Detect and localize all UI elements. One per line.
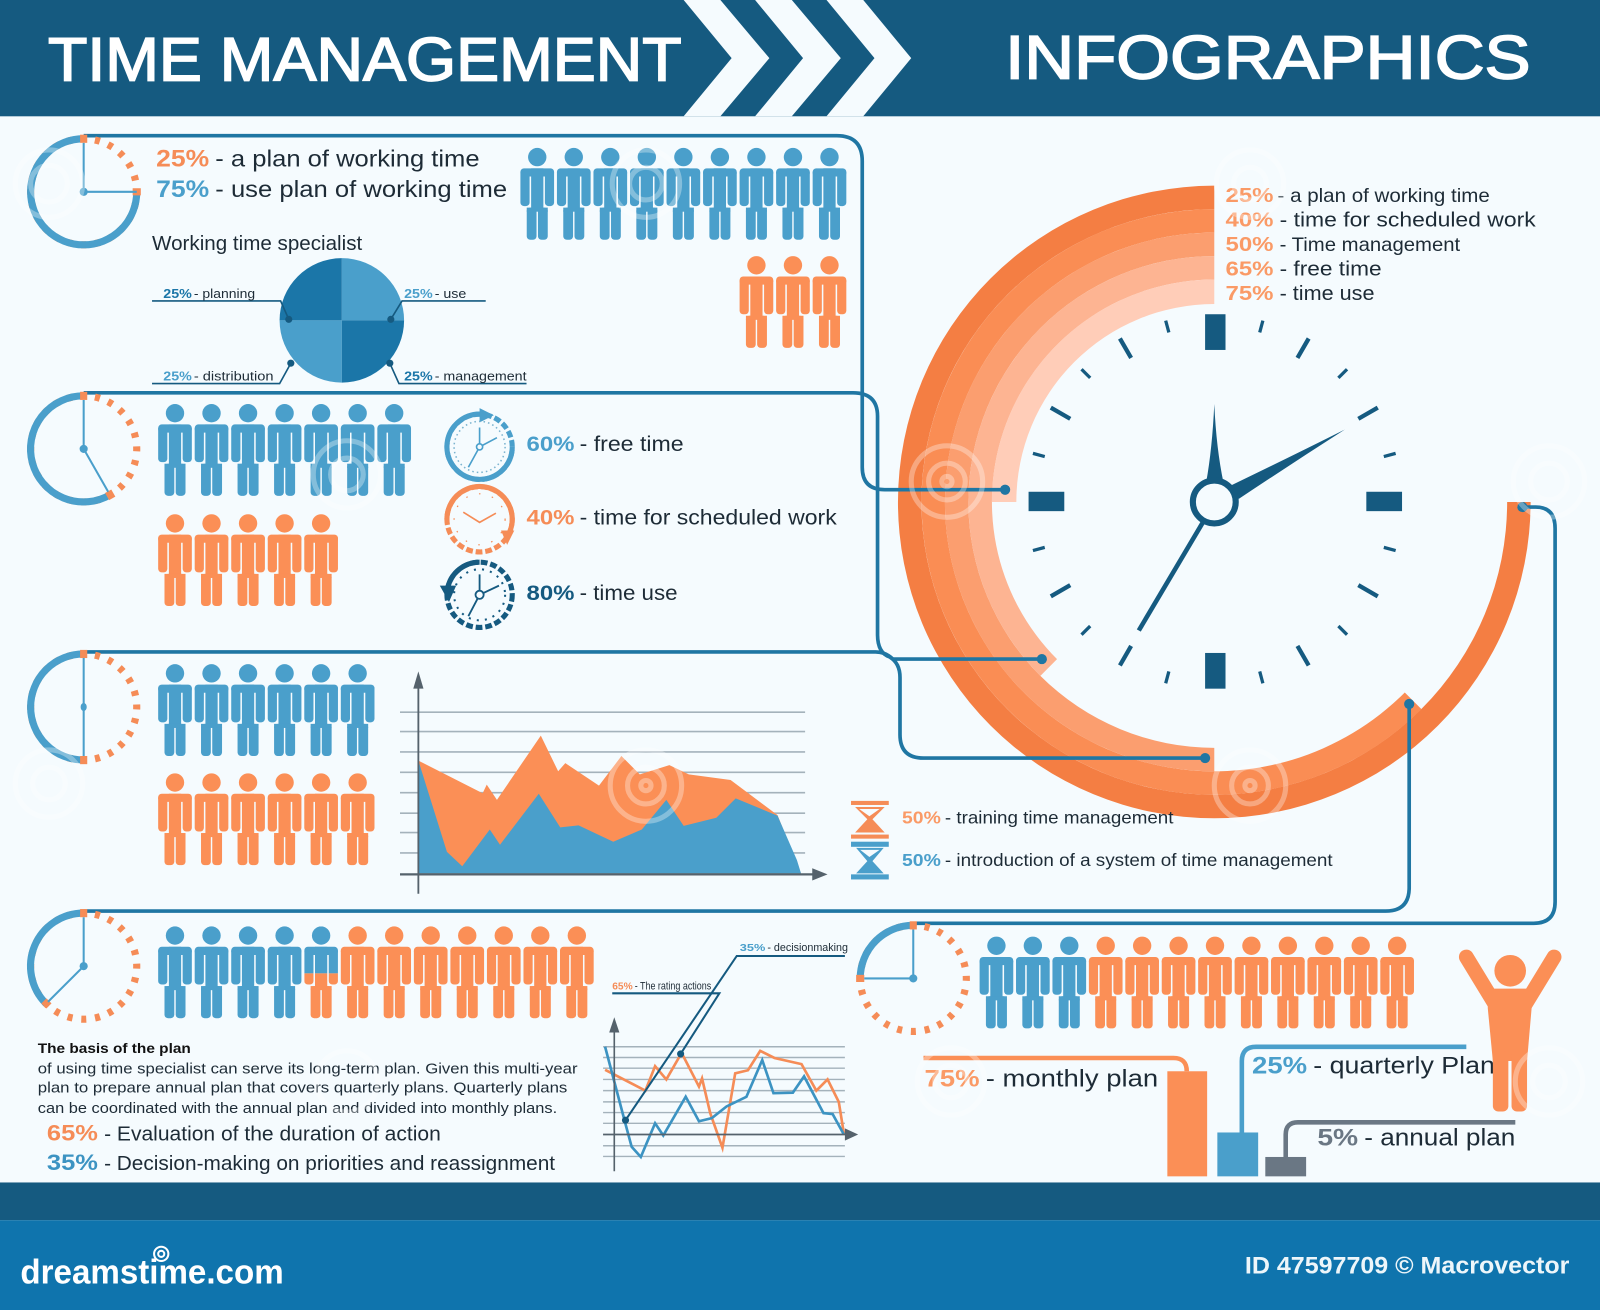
panel: plan of working time <box>31 135 846 384</box>
people: row <box>980 937 1414 1028</box>
stat: training: - training time management <box>945 807 1174 827</box>
icon: clock 50% <box>31 650 137 764</box>
people: blue row <box>158 664 374 756</box>
pie chart <box>280 258 404 383</box>
logo: dreamstime: dreamstime.com <box>20 1253 284 1291</box>
icon: logo swirl <box>154 1247 168 1261</box>
ring legend <box>1226 185 1537 305</box>
connector lines <box>84 136 1555 923</box>
icon: blue hourglass <box>851 842 889 879</box>
icon: cheering person <box>1466 955 1554 1112</box>
stat: training: 50% <box>902 807 941 827</box>
bar: monthly plan: 75% <box>924 1066 980 1093</box>
pie label: distribution <box>152 360 294 384</box>
stat 40%: - time for scheduled work <box>580 505 837 529</box>
panel: training <box>31 650 1333 894</box>
big clock ring <box>898 186 1531 818</box>
ring legend: - a plan of working time <box>1278 185 1490 207</box>
callout: rating actions: - The rating actions <box>635 981 711 993</box>
bar: quarterly plan: - quarterly Plan <box>1313 1052 1495 1079</box>
panel: plans <box>856 921 1554 1176</box>
panel: basis of the plan <box>31 909 858 1175</box>
bar: monthly plan: - monthly plan <box>986 1066 1158 1093</box>
stat 25%: - a plan of working time <box>215 145 480 171</box>
text block: basis of the plan: can be coordinated with the annual plan and divided into monthly plans. <box>38 1101 557 1117</box>
icon: orange hourglass <box>851 801 889 839</box>
text block: basis of the plan: of using time specialist can serve its long-term plan. Given this multi-year <box>38 1061 578 1077</box>
stat 80% <box>527 581 678 605</box>
footer band <box>0 1182 1600 1310</box>
icon: clock 75% <box>856 921 966 1031</box>
stat 65%: 65% <box>47 1121 98 1146</box>
watermark swirls <box>15 150 1585 1115</box>
stat: introduction: - introduction of a system of time management <box>945 850 1333 870</box>
stat 75%: - use plan of working time <box>215 176 507 202</box>
bar: monthly plan <box>923 1058 1207 1176</box>
ring legend: - time use <box>1280 283 1374 305</box>
ring legend: - time for scheduled work <box>1280 209 1537 231</box>
bar: annual plan: 5% <box>1317 1125 1358 1152</box>
icon: clock 60% <box>31 392 137 502</box>
stat 65%: - Evaluation of the duration of action <box>104 1124 441 1146</box>
ring legend: 25% <box>1226 185 1273 207</box>
stat 60%: 60% <box>527 432 574 456</box>
pie label: management <box>386 360 527 384</box>
title: infographics: INFOGRAPHICS <box>1005 24 1531 92</box>
bar: quarterly plan <box>1217 1047 1495 1176</box>
callout: rating actions: 65% <box>612 982 633 993</box>
title: time management: TIME MANAGEMENT <box>48 26 682 94</box>
stat 75%: 75% <box>156 176 209 203</box>
bar: quarterly plan: 25% <box>1252 1052 1307 1079</box>
callout: decision making: 35% <box>740 943 765 954</box>
big clock face <box>1029 314 1402 689</box>
ring legend: 75% <box>1226 283 1273 305</box>
credit: ID 47597709 © Macrovector <box>1245 1252 1570 1279</box>
pie label: management: 25% <box>404 369 433 384</box>
callout: decision making <box>622 942 848 1124</box>
pie label: management: - management <box>435 369 527 384</box>
ring legend: - Time management <box>1280 234 1461 256</box>
text block: basis of the plan: plan to prepare annual plan that covers quarterly plans. Quarterly plans <box>38 1081 567 1097</box>
stat 25%: 25% <box>156 145 209 172</box>
pie label: planning: - planning <box>194 286 255 301</box>
ring legend: 40% <box>1226 209 1273 231</box>
clock hands <box>1139 404 1345 631</box>
stat 60% <box>527 432 684 456</box>
callout: decision making: - decisionmaking <box>767 942 848 954</box>
stat 35%: - Decision-making on priorities and reassignment <box>104 1153 555 1175</box>
icon: blue mini clock <box>442 408 517 485</box>
text block: basis of the plan: The basis of the plan <box>38 1041 191 1056</box>
stat 40%: 40% <box>527 505 574 529</box>
bar: annual plan <box>1265 1122 1515 1176</box>
stat 80%: - time use <box>580 581 678 605</box>
ring legend: 65% <box>1226 258 1273 280</box>
icon: orange mini clock <box>447 486 514 552</box>
pie label: use: 25% <box>404 286 433 301</box>
pie label: distribution: - distribution <box>194 369 273 384</box>
pie label: use: - use <box>435 286 466 301</box>
bar: annual plan: - annual plan <box>1364 1125 1515 1152</box>
stat 35%: 35% <box>47 1150 98 1175</box>
header band <box>0 0 1600 116</box>
area chart <box>400 671 828 894</box>
people: blue row <box>158 404 411 496</box>
people: orange row <box>158 773 374 865</box>
icon: navy mini clock <box>440 562 512 627</box>
people: orange row <box>740 256 846 348</box>
ring legend: 50% <box>1226 234 1273 256</box>
pie label: distribution: 25% <box>163 369 192 384</box>
people: blue row <box>520 148 846 240</box>
chevron arrows <box>684 0 911 116</box>
line chart <box>603 1017 858 1171</box>
text block: basis of the plan <box>38 1041 578 1117</box>
people: mixed row <box>158 926 594 1018</box>
icon: clock 65% <box>31 909 137 1019</box>
heading: working time specialist: Working time specialist <box>152 233 363 255</box>
pie label: planning <box>152 286 292 323</box>
stat 80%: 80% <box>527 581 574 605</box>
icon: clock 25% <box>31 135 141 245</box>
stat 60%: - free time <box>580 432 684 456</box>
callout: rating actions <box>612 981 719 1057</box>
stat: introduction: 50% <box>902 850 941 870</box>
pie label: planning: 25% <box>163 286 192 301</box>
ring legend: - free time <box>1280 258 1382 280</box>
panel: free time <box>31 392 837 627</box>
people: orange row <box>158 514 338 606</box>
pie label: use <box>387 286 486 323</box>
